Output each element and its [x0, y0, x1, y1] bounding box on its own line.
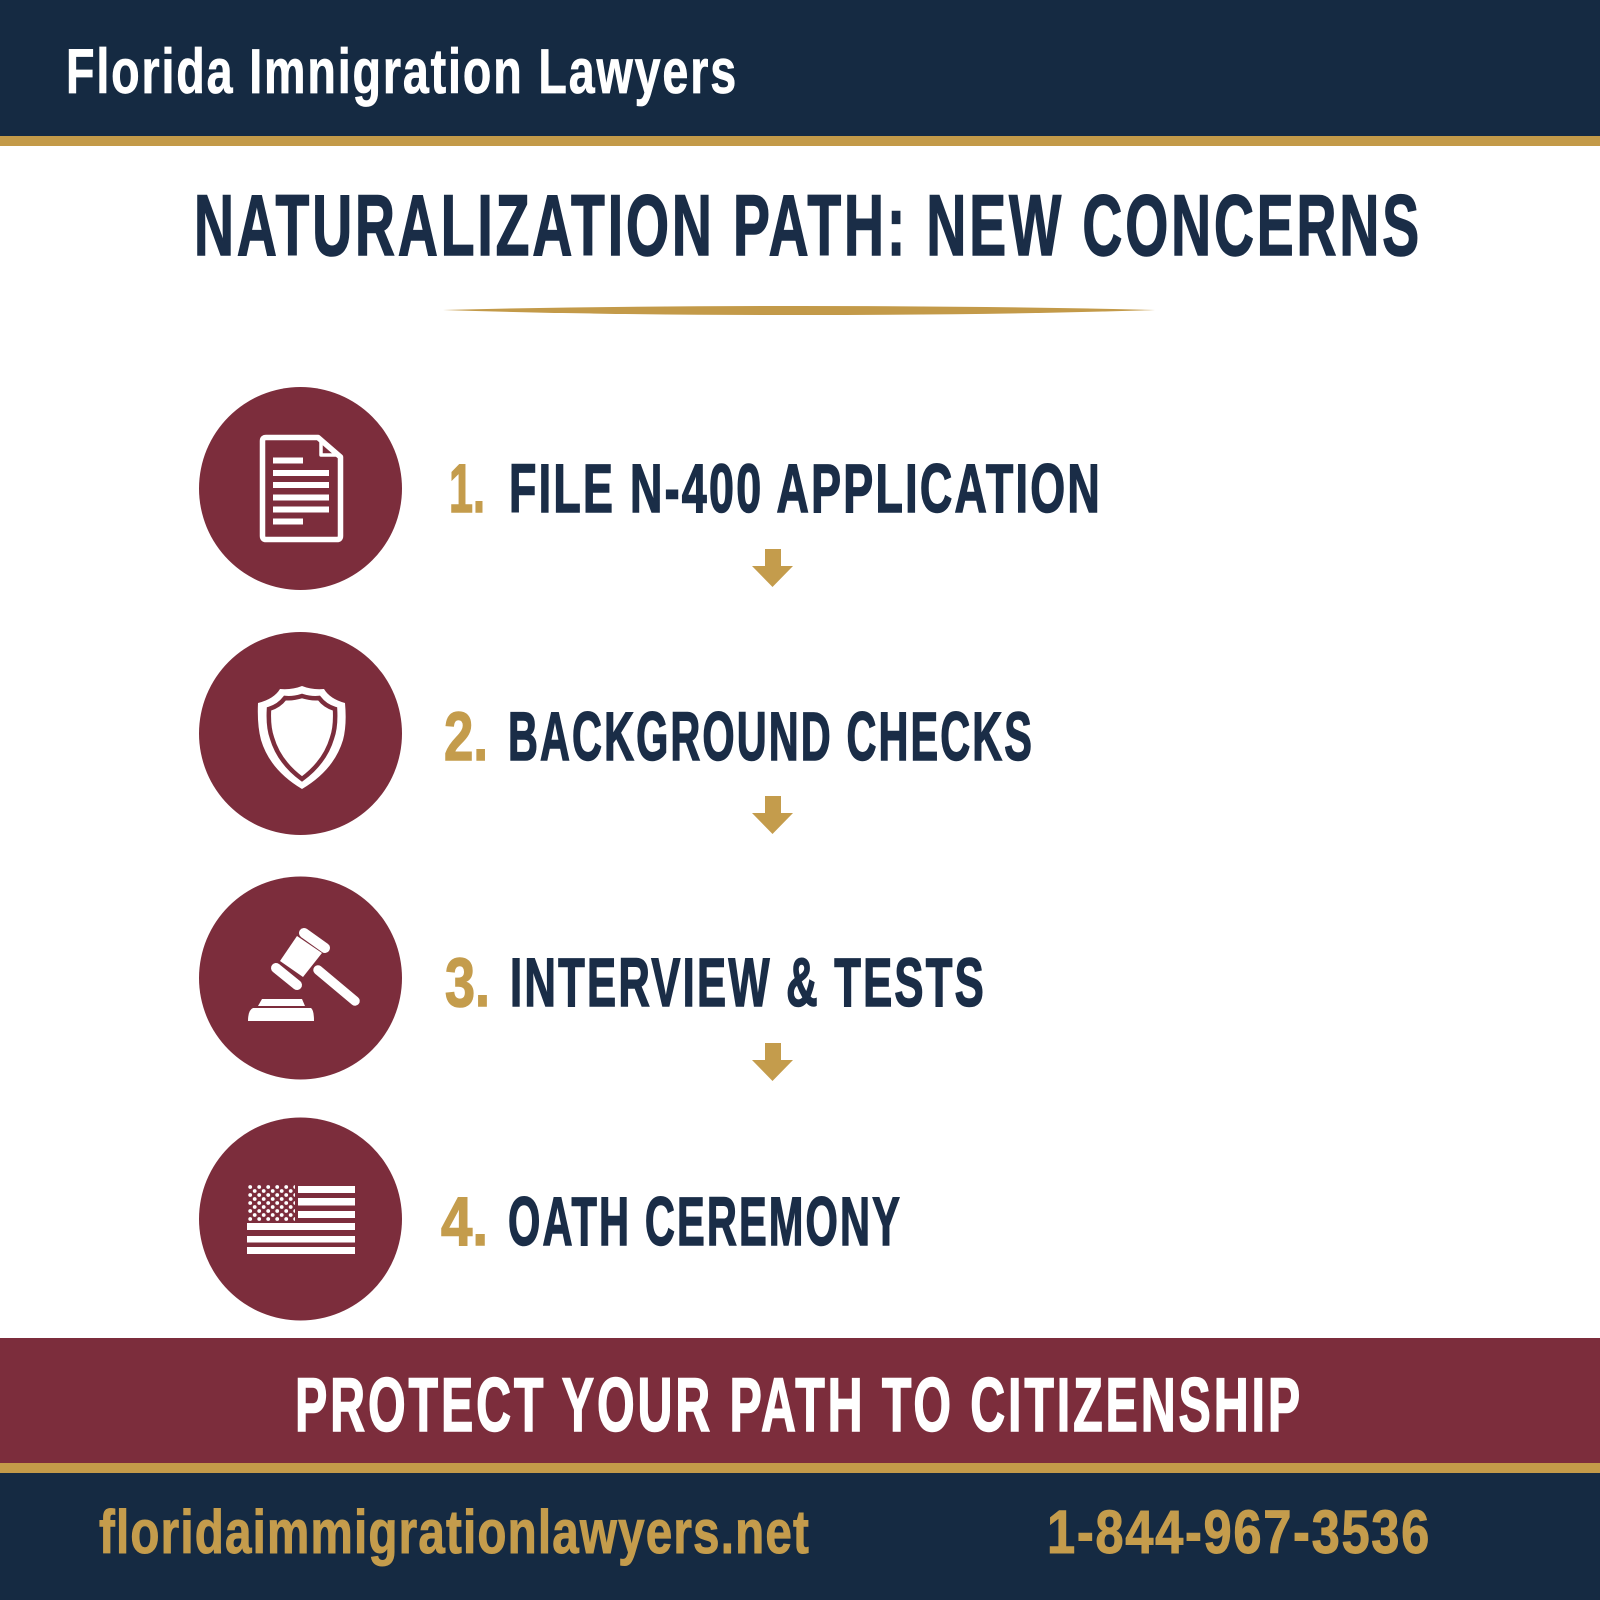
step 1: file application — [199, 387, 1102, 590]
arrow 3 — [752, 1043, 793, 1081]
arrow 1 — [752, 549, 793, 587]
header bar — [0, 0, 1600, 146]
phone number: 1-844-967-3536 — [1047, 1498, 1431, 1566]
step 3 label: INTERVIEW & TESTS — [510, 944, 986, 1021]
step 4: oath ceremony — [199, 1118, 902, 1320]
arrow 2 — [752, 796, 793, 834]
header firm name: Florida Imnigration Lawyers — [66, 37, 738, 107]
icon: shield — [258, 686, 346, 789]
title underline — [443, 306, 1155, 315]
icon: gavel — [248, 933, 355, 1021]
step 2 number: 2. — [444, 698, 488, 775]
step 4 number: 4. — [441, 1183, 488, 1260]
step 1 label: FILE N-400 APPLICATION — [509, 450, 1102, 527]
step 2: background checks — [199, 632, 1034, 835]
call to action banner — [0, 1338, 1600, 1463]
icon: american flag — [247, 1185, 355, 1254]
step 3 number: 3. — [445, 944, 490, 1021]
step 4 label: OATH CEREMONY — [508, 1183, 902, 1260]
step 3: interview and tests — [199, 876, 986, 1080]
footer — [0, 1463, 1600, 1600]
step 1 number: 1. — [449, 450, 485, 527]
step 2 label: BACKGROUND CHECKS — [508, 698, 1034, 775]
website: floridaimmigrationlawyers.net — [99, 1498, 810, 1566]
icon: document — [262, 438, 340, 540]
